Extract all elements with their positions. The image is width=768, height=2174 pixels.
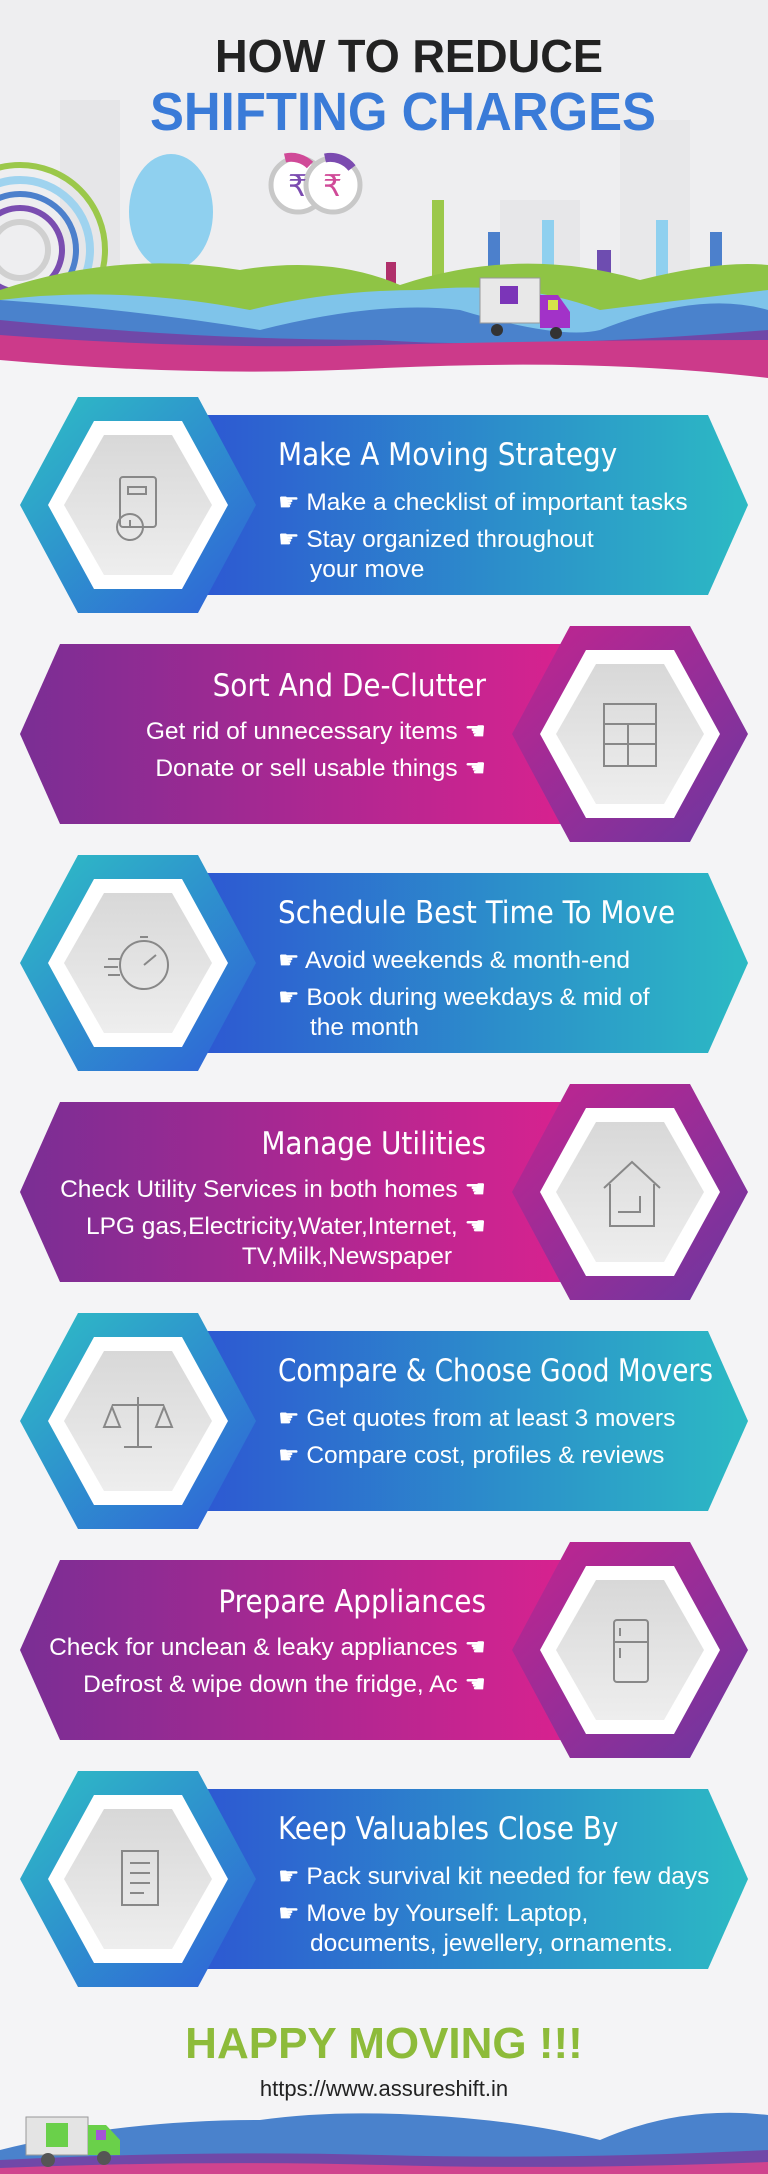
panel: make a moving strategy: your move xyxy=(310,556,424,583)
hexagon icon: documents xyxy=(20,1771,256,1987)
header background xyxy=(0,0,768,360)
panel: make a moving strategy: ☛ Make a checklist of important tasks xyxy=(278,488,688,516)
title xyxy=(150,30,656,142)
panel: keep valuables close by: Keep Valuables Close By xyxy=(278,1811,618,1847)
panel: keep valuables close by: ☛ Move by Yourself: Laptop, xyxy=(278,1899,588,1927)
icon: rupee coins: ₹ xyxy=(288,169,307,204)
icon: truck footer xyxy=(26,2117,120,2167)
hexagon icon: shelf xyxy=(512,626,748,842)
panel: manage utilities: TV,Milk,Newspaper xyxy=(242,1243,452,1270)
panel: compare and choose good movers: Compare & Choose Good Movers xyxy=(278,1353,713,1389)
closing heading: HAPPY MOVING !!! xyxy=(185,2019,583,2068)
hexagon icon: scale xyxy=(20,1313,256,1529)
hexagon icon: clipboard timer xyxy=(20,397,256,613)
panel: schedule best time to move xyxy=(20,855,748,1071)
panel: schedule best time to move: ☛ Avoid weekends & month-end xyxy=(278,946,630,974)
panel: compare and choose good movers: ☛ Compare cost, profiles & reviews xyxy=(278,1441,664,1469)
panel: manage utilities: LPG gas,Electricity,Water,Internet, ☚ xyxy=(86,1212,486,1240)
panel: manage utilities: Manage Utilities xyxy=(261,1126,486,1162)
panel: schedule best time to move: ☛ Book during weekdays & mid of xyxy=(278,983,650,1011)
panel: manage utilities: Check Utility Services in both homes ☚ xyxy=(60,1175,486,1203)
panel: sort and de-clutter: Get rid of unnecessary items ☚ xyxy=(146,717,486,745)
panel: make a moving strategy: ☛ Stay organized throughout xyxy=(278,525,594,553)
hexagon icon: stopwatch xyxy=(20,855,256,1071)
icon: balloon xyxy=(129,154,213,324)
panel: sort and de-clutter: Donate or sell usable things ☚ xyxy=(155,754,486,782)
panel: sort and de-clutter: Sort And De-Clutter xyxy=(213,668,487,704)
panel: make a moving strategy: Make A Moving Strategy xyxy=(278,437,617,473)
title: SHIFTING CHARGES xyxy=(150,82,656,142)
footer waves xyxy=(0,2113,768,2174)
panel: keep valuables close by xyxy=(20,1771,748,1987)
panel: keep valuables close by: ☛ Pack survival kit needed for few days xyxy=(278,1862,709,1890)
panel: compare and choose good movers xyxy=(20,1313,748,1529)
bar chart decoration xyxy=(386,200,722,320)
icon: truck header xyxy=(480,278,570,339)
panel: schedule best time to move: Schedule Best Time To Move xyxy=(278,895,675,931)
hexagon icon: house pipe xyxy=(512,1084,748,1300)
url text: https://www.assureshift.in xyxy=(260,2076,508,2101)
hexagon icon: fridge xyxy=(512,1542,748,1758)
panel: prepare appliances: Check for unclean & leaky appliances ☚ xyxy=(49,1633,486,1661)
panel: sort and de-clutter xyxy=(20,626,748,842)
panel: prepare appliances: Prepare Appliances xyxy=(218,1584,486,1620)
panel: keep valuables close by: documents, jewellery, ornaments. xyxy=(310,1930,673,1957)
title: HOW TO REDUCE xyxy=(215,30,603,82)
panel: prepare appliances: Defrost & wipe down the fridge, Ac ☚ xyxy=(83,1670,486,1698)
panel: schedule best time to move: the month xyxy=(310,1014,419,1041)
panel: prepare appliances xyxy=(20,1542,748,1758)
panel: manage utilities xyxy=(20,1084,748,1300)
icon: rupee coins: ₹ xyxy=(323,169,342,204)
header waves xyxy=(0,263,768,378)
panel: compare and choose good movers: ☛ Get quotes from at least 3 movers xyxy=(278,1404,675,1432)
icon: target circles xyxy=(0,165,105,335)
panel: make a moving strategy xyxy=(20,397,748,613)
icon: rupee coins xyxy=(271,157,360,212)
